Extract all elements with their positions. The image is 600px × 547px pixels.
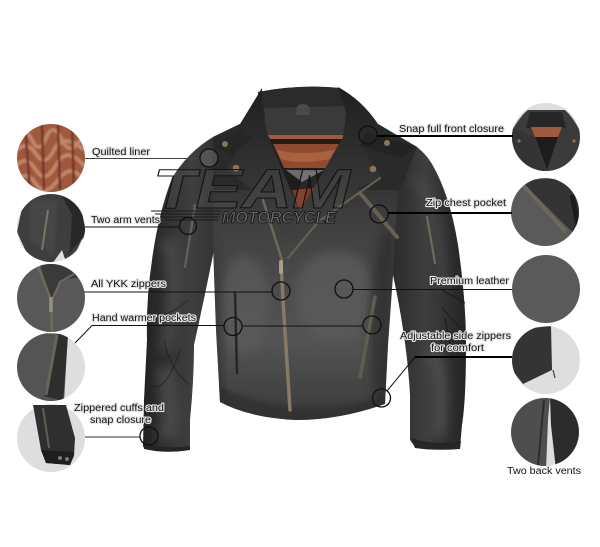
label: all YKK zippers: All YKK zippers xyxy=(91,279,166,290)
left shoulder strap xyxy=(214,128,252,156)
jacket xyxy=(143,87,466,452)
label: premium leather: Premium leather xyxy=(430,276,510,287)
neck label xyxy=(296,104,310,115)
label: snap full front closure: Snap full front closure xyxy=(399,124,504,135)
label: adjustable side zippers: Adjustable side zippers xyxy=(400,331,511,342)
detail circle: zip chest pocket xyxy=(511,178,579,246)
callout markers xyxy=(140,126,390,445)
detail circle: adjustable side zippers xyxy=(512,326,580,394)
zippers xyxy=(185,178,435,410)
label: snap closure: snap closure xyxy=(90,415,151,426)
jacket body xyxy=(213,190,397,420)
label: quilted liner: Quilted liner xyxy=(92,147,151,158)
detail circle: zippered cuffs xyxy=(17,404,85,472)
detail circle: two back vents xyxy=(511,398,579,466)
jacket left sleeve xyxy=(143,124,240,452)
red lining xyxy=(268,135,344,212)
detail circle: hand warmer pockets xyxy=(17,333,85,401)
right lapel xyxy=(284,87,381,262)
label: two back vents: Two back vents xyxy=(507,466,581,477)
label: hand warmer pockets: Hand warmer pockets xyxy=(92,313,196,324)
labels xyxy=(74,124,581,477)
collar inner xyxy=(264,104,348,137)
snaps xyxy=(222,140,390,172)
detail circle: two arm vents xyxy=(17,194,85,262)
label: for comfort: for comfort xyxy=(431,343,484,354)
watermark: TEAM MOTORCYCLE logo: TEAM xyxy=(153,157,352,220)
label: zip chest pocket: Zip chest pocket xyxy=(426,198,506,209)
collar top band xyxy=(258,87,346,108)
right shoulder strap xyxy=(360,132,417,158)
detail circle: all YKK zippers xyxy=(17,264,85,332)
detail circle: premium leather xyxy=(512,255,580,323)
label: zippered cuffs: Zippered cuffs and xyxy=(74,403,164,414)
detail circle: snap full front closure xyxy=(512,103,580,171)
left lapel xyxy=(222,88,300,262)
leader lines xyxy=(75,136,513,437)
left shoulder fill xyxy=(213,124,262,190)
label: two arm vents: Two arm vents xyxy=(91,215,160,226)
watermark: TEAM MOTORCYCLE logo: MOTORCYCLE xyxy=(222,208,337,227)
neck backing xyxy=(258,87,350,215)
detail circle: quilted liner xyxy=(17,124,85,192)
jacket right sleeve xyxy=(378,124,466,450)
right shoulder fill xyxy=(355,124,417,190)
